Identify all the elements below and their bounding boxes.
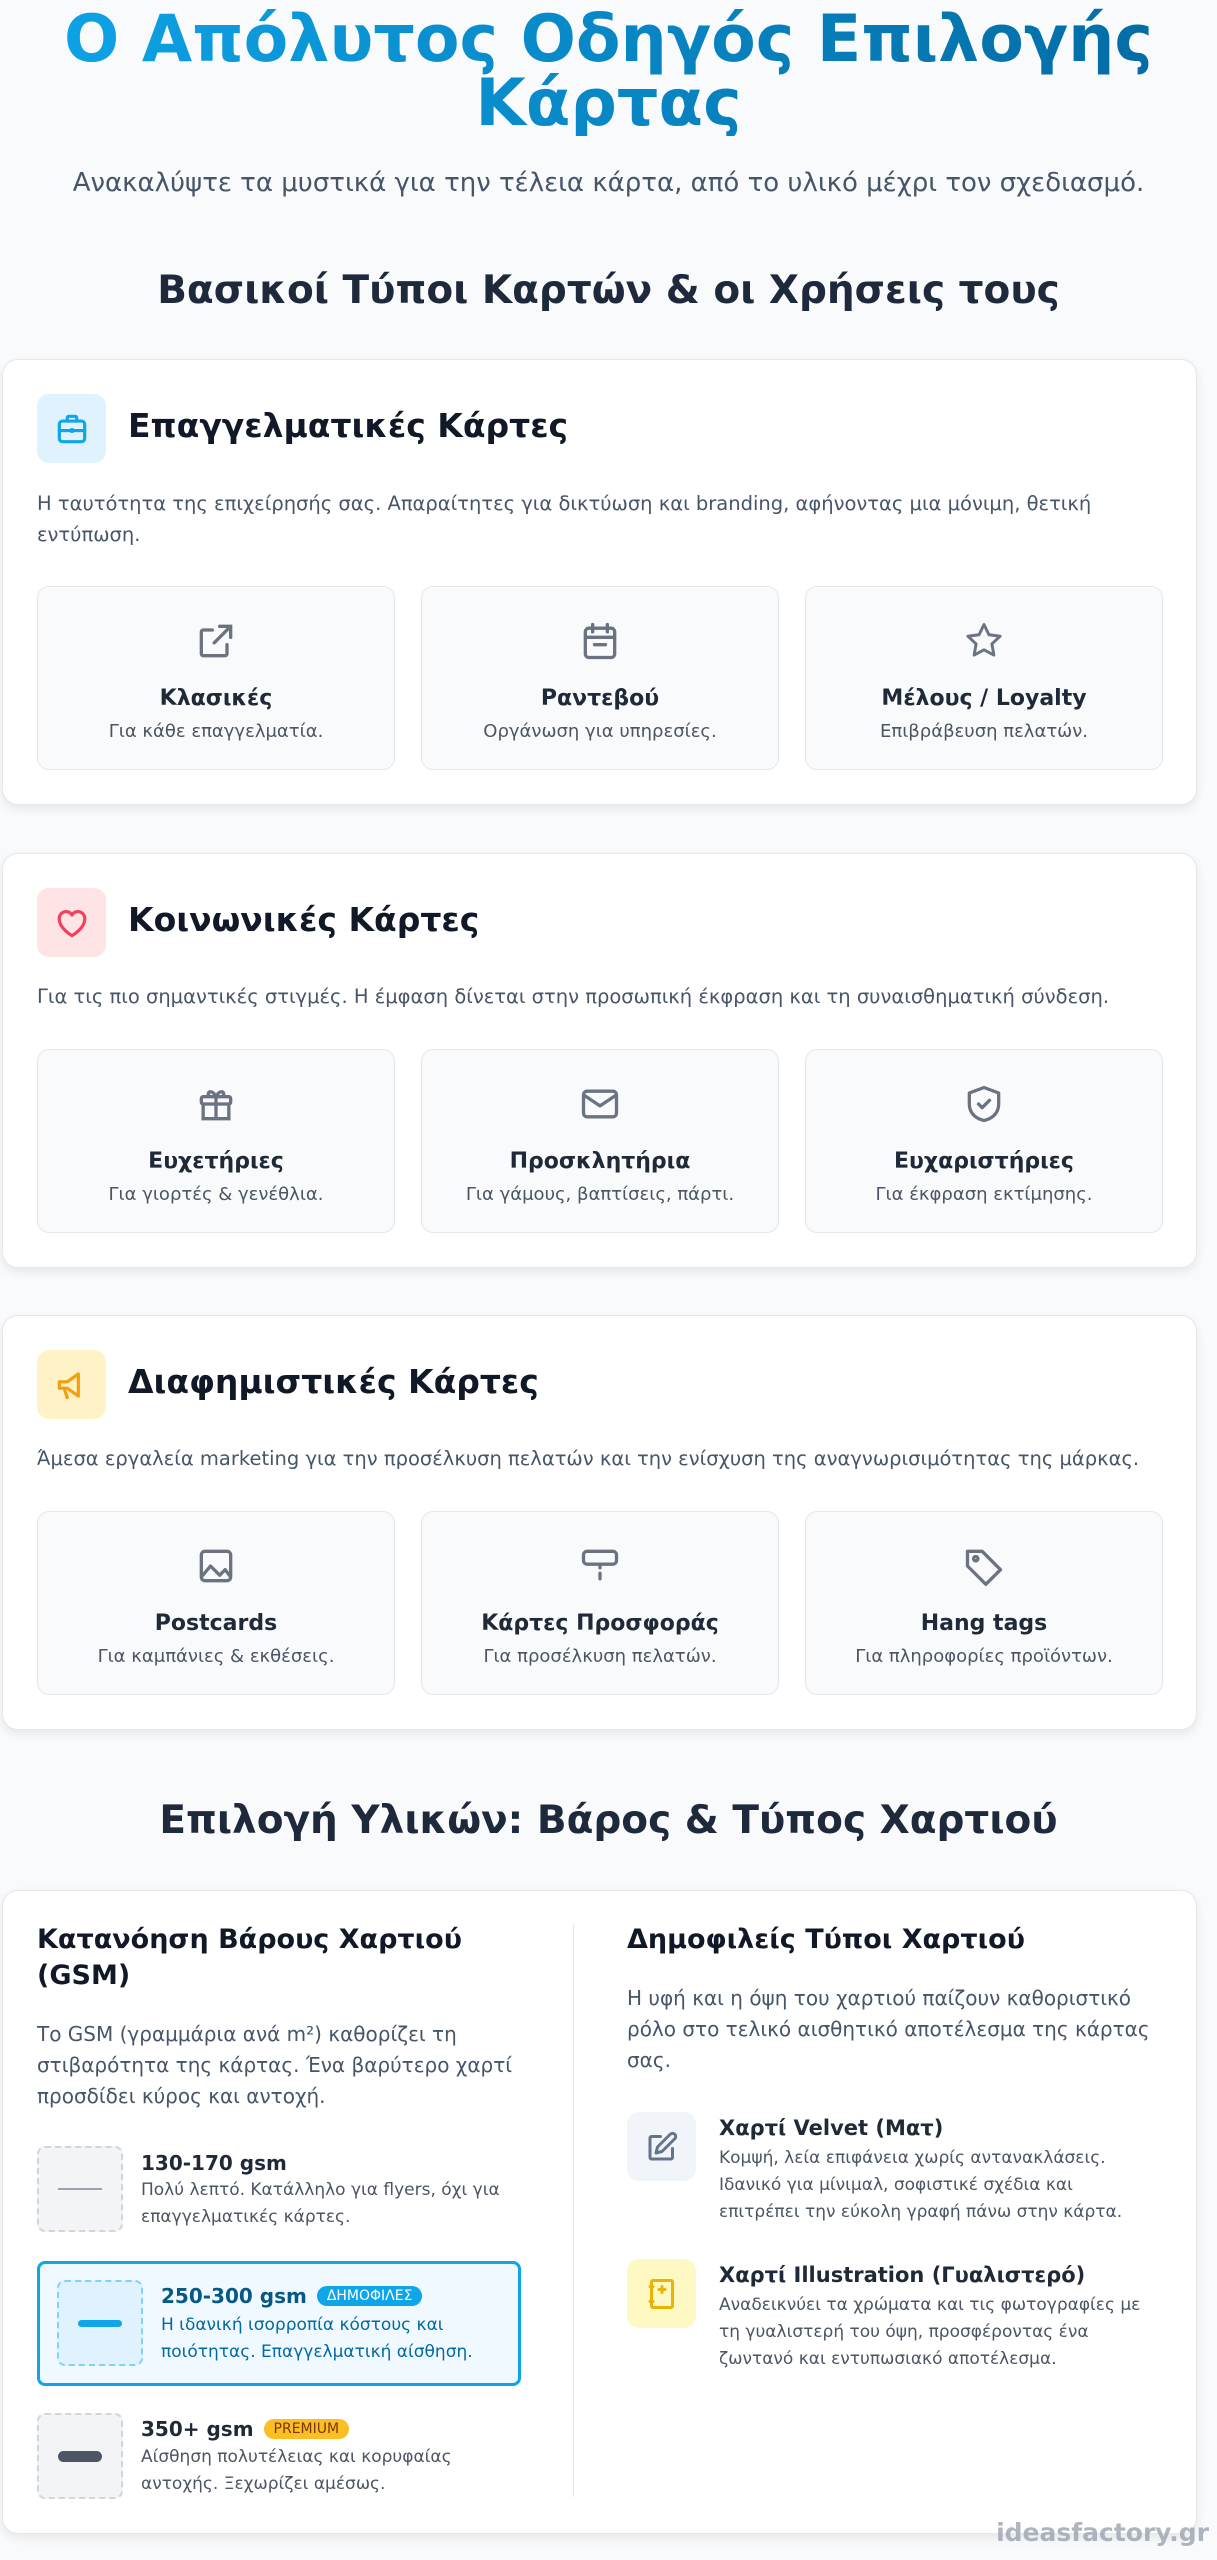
subcard: wishes: Ευχετήριες bbox=[148, 1149, 284, 1174]
paper type: illustration: Αναδεικνύει τα χρώματα και τις φωτογραφίες με τη γυαλιστερή του όψη, προσφέροντας ένα ζωντανό και εντυπωσιακό αποτέλεσμα. bbox=[719, 2295, 1140, 2369]
subcard: thanks: Ευχαριστήριες bbox=[894, 1149, 1074, 1174]
subcard: appointment: Οργάνωση για υπηρεσίες. bbox=[483, 721, 717, 742]
description: Η ταυτότητα της επιχείρησής σας. Απαραίτητες για δικτύωση και branding, αφήνοντας μια μόνιμη, θετική εντύπωση. bbox=[37, 492, 1091, 546]
section heading: card types: Βασικοί Τύποι Καρτών & οι Χρήσεις τους bbox=[157, 268, 1060, 313]
left column heading: Κατανόηση Βάρους Χαρτιού (GSM) bbox=[37, 1924, 462, 1991]
paper type: velvet: Χαρτί Velvet (Ματ) bbox=[719, 2116, 943, 2140]
subcard: invitations: Για γάμους, βαπτίσεις, πάρτι. bbox=[466, 1184, 734, 1205]
gsm item: 250-300 popular bbox=[37, 2261, 521, 2386]
right paragraph: Η υφή και η όψη του χαρτιού παίζουν καθοριστικό ρόλο στο τελικό αισθητικό αποτέλεσμα της κάρτας σας. bbox=[627, 1986, 1150, 2072]
description: Άμεσα εργαλεία marketing για την προσέλκυση πελατών και την ενίσχυση της αναγνωρισιμότητας της μάρκας. bbox=[37, 1447, 1139, 1470]
icon: pencil bbox=[627, 2112, 696, 2181]
heading: Επαγγελματικές Κάρτες bbox=[128, 406, 568, 445]
heading: Διαφημιστικές Κάρτες bbox=[128, 1362, 539, 1401]
gsm item: 250-300 popular: 250-300 gsm bbox=[161, 2284, 307, 2308]
paper type: illustration bbox=[627, 2259, 1140, 2369]
panel: business cards bbox=[2, 359, 1197, 805]
subcard: loyalty: Μέλους / Loyalty bbox=[881, 686, 1087, 711]
description: Για τις πιο σημαντικές στιγμές. Η έμφαση δίνεται στην προσωπική έκφραση και τη συναισθηματική σύνδεση. bbox=[37, 985, 1109, 1008]
subcard: thanks bbox=[805, 1049, 1163, 1233]
watermark: ideasfactory.gr bbox=[996, 2518, 1209, 2547]
subcard: loyalty bbox=[805, 586, 1163, 770]
subcard: postcards: Για καμπάνιες & εκθέσεις. bbox=[98, 1646, 334, 1667]
paper type: illustration: Χαρτί Illustration (Γυαλιστερό) bbox=[719, 2263, 1085, 2287]
panel: materials bbox=[2, 1890, 1197, 2534]
subcard: hang tags bbox=[805, 1511, 1163, 1695]
gsm item: 130-170: 130-170 gsm bbox=[141, 2151, 287, 2175]
heading: Κοινωνικές Κάρτες bbox=[128, 900, 479, 939]
subcard: classic bbox=[37, 586, 395, 770]
icon: megaphone bbox=[37, 1350, 106, 1419]
subcard: wishes bbox=[37, 1049, 395, 1233]
icon: glossy sheet bbox=[627, 2259, 696, 2328]
panel: promotional cards bbox=[2, 1315, 1197, 1730]
subcard: thanks: Για έκφραση εκτίμησης. bbox=[876, 1184, 1092, 1205]
subcard: offers bbox=[421, 1511, 779, 1695]
panel: social cards bbox=[2, 853, 1197, 1268]
title: Κάρτας bbox=[475, 66, 742, 141]
subcard: postcards: Postcards bbox=[155, 1611, 277, 1636]
subcard: invitations bbox=[421, 1049, 779, 1233]
subtitle: Ανακαλύψτε τα μυστικά για την τέλεια κάρτα, από το υλικό μέχρι τον σχεδιασμό. bbox=[73, 168, 1144, 198]
left paragraph: Το GSM (γραμμάρια ανά m²) καθορίζει τη στιβαρότητα της κάρτας. Ένα βαρύτερο χαρτί προσδίδει κύρος και αντοχή. bbox=[37, 2022, 512, 2108]
gsm item: 350+ premium: 350+ gsm bbox=[141, 2417, 254, 2441]
subcard: wishes: Για γιορτές & γενέθλια. bbox=[108, 1184, 324, 1205]
title bbox=[0, 8, 1217, 136]
gsm item: 350+ premium: Αίσθηση πολυτέλειας και κορυφαίας αντοχής. Ξεχωρίζει αμέσως. bbox=[141, 2447, 452, 2494]
subcard: offers: Για προσέλκυση πελατών. bbox=[483, 1646, 717, 1667]
subcard: classic: Για κάθε επαγγελματία. bbox=[109, 721, 323, 742]
subcard: hang tags: Για πληροφορίες προϊόντων. bbox=[855, 1646, 1113, 1667]
subcard: loyalty: Επιβράβευση πελατών. bbox=[880, 721, 1088, 742]
icon: briefcase bbox=[37, 394, 106, 463]
paper type: velvet: Κομψή, λεία επιφάνεια χωρίς αντανακλάσεις. Ιδανικό για μίνιμαλ, σοφιστικέ σχέδια και επιτρέπει την εύκολη γραφή πάνω στην κάρτα. bbox=[719, 2148, 1122, 2222]
section heading: materials: Επιλογή Υλικών: Βάρος & Τύπος Χαρτιού bbox=[159, 1798, 1058, 1843]
right column heading: Δημοφιλείς Τύποι Χαρτιού bbox=[627, 1924, 1025, 1955]
title: Ο Απόλυτος Οδηγός Επιλογής bbox=[64, 2, 1153, 77]
gsm item: 130-170 bbox=[37, 2146, 500, 2232]
gsm item: 350+ premium: PREMIUM bbox=[274, 2421, 339, 2437]
icon: heart bbox=[37, 888, 106, 957]
subcard: offers: Κάρτες Προσφοράς bbox=[481, 1611, 719, 1636]
gsm item: 250-300 popular: ΔΗΜΟΦΙΛΕΣ bbox=[327, 2288, 412, 2304]
subcard: postcards bbox=[37, 1511, 395, 1695]
paper type: velvet bbox=[627, 2112, 1122, 2222]
subcard: hang tags: Hang tags bbox=[921, 1611, 1047, 1636]
subcard: appointment: Ραντεβού bbox=[541, 686, 659, 711]
gsm item: 350+ premium bbox=[37, 2413, 452, 2499]
gsm item: 250-300 popular: Η ιδανική ισορροπία κόστους και ποιότητας. Επαγγελματική αίσθηση. bbox=[161, 2315, 473, 2362]
subcard: appointment bbox=[421, 586, 779, 770]
subcard: invitations: Προσκλητήρια bbox=[510, 1149, 690, 1174]
gsm item: 130-170: Πολύ λεπτό. Κατάλληλο για flyers, όχι για επαγγελματικές κάρτες. bbox=[141, 2180, 500, 2227]
subcard: classic: Κλασικές bbox=[160, 686, 272, 711]
